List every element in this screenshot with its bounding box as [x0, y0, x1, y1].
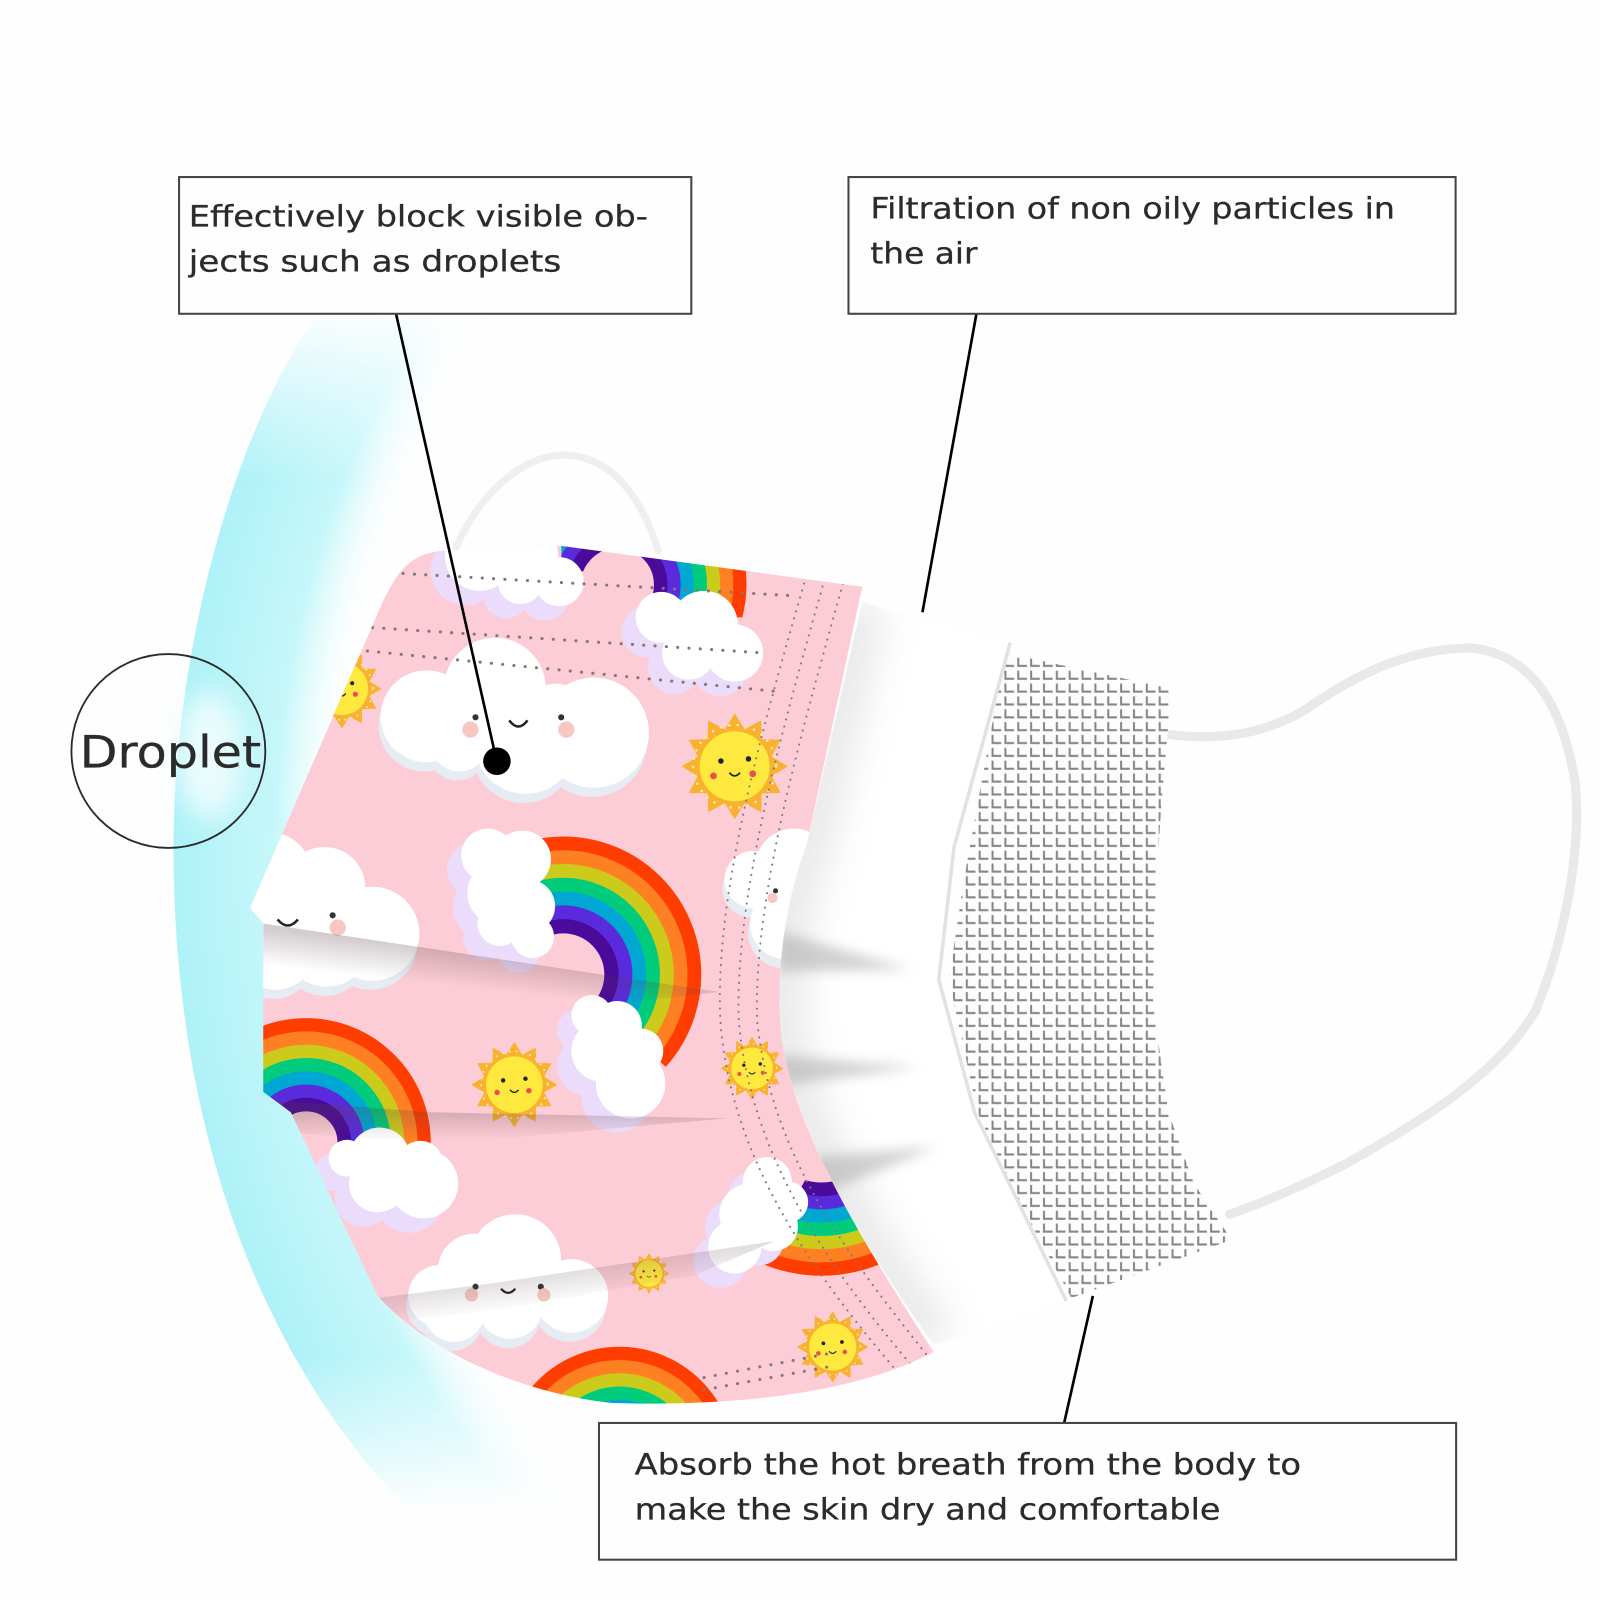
- cloud: lower right: [708, 1157, 808, 1273]
- rainbow: top: [561, 546, 746, 618]
- cloud: top right: [636, 591, 763, 682]
- cloud face: large: [462, 714, 574, 738]
- cloud: top left: [445, 521, 584, 606]
- rainbow: lower left: [263, 1018, 431, 1146]
- pink mask front layer: [250, 546, 934, 1404]
- sun: centre: [471, 1042, 557, 1128]
- ear loop: left: [456, 455, 658, 551]
- callout: filtration: [848, 177, 1456, 314]
- cloud: lower left: [329, 1128, 458, 1218]
- leader: absorb: [1064, 1296, 1093, 1422]
- cloud: right partial: [722, 828, 810, 968]
- sun: left partial: [332, 654, 382, 728]
- callout: absorb: make the skin dry and comfortable: [635, 1492, 1220, 1526]
- droplet shield gradient: [153, 306, 776, 1526]
- sun: bottom right: [797, 1311, 868, 1383]
- cloud face: bottom: [465, 1284, 551, 1302]
- sun: upper right: [682, 713, 788, 819]
- sun: centre right: [720, 1037, 784, 1100]
- cloud: large smiling: [381, 638, 649, 794]
- cloud face: left: [278, 912, 346, 936]
- callout: absorb: Absorb the hot breath from the body to: [635, 1447, 1301, 1481]
- pink fabric: [235, 531, 949, 1418]
- leader: filtration: [922, 313, 977, 612]
- panel left edge shading: [779, 602, 934, 1345]
- cloud: bottom smiling: [408, 1214, 608, 1342]
- white side panel: [776, 602, 1066, 1345]
- leader: droplets: [396, 313, 511, 775]
- callout: block droplets: Effectively block visible ob-: [189, 200, 648, 234]
- ear loop: right: [1169, 648, 1577, 1214]
- fold shading: [263, 923, 776, 1321]
- rainbow: large centre: [540, 836, 702, 1067]
- cloud: left folded: [250, 834, 420, 999]
- panel inner edge: [939, 643, 1066, 1301]
- cloud face: right partial: [767, 888, 778, 903]
- stitching lines: [367, 573, 929, 1390]
- rainbow: lower right: [764, 1180, 879, 1276]
- droplet badge: Droplet: [80, 725, 261, 778]
- callout: absorb: [599, 1423, 1456, 1560]
- droplet badge: [71, 654, 265, 848]
- sun: small: [629, 1253, 669, 1294]
- callout: filtration: Filtration of non oily particles in: [870, 191, 1395, 225]
- callout: filtration: the air: [870, 236, 978, 270]
- rainbow: bottom: [532, 1346, 718, 1404]
- inner mesh layer: [949, 653, 1232, 1298]
- callout: block droplets: jects such as droplets: [188, 244, 561, 278]
- cloud: rainbow left end: [461, 829, 555, 958]
- callout: block droplets: [179, 177, 691, 314]
- panel creases: [776, 931, 937, 1194]
- cloud: rainbow right end: [571, 995, 665, 1118]
